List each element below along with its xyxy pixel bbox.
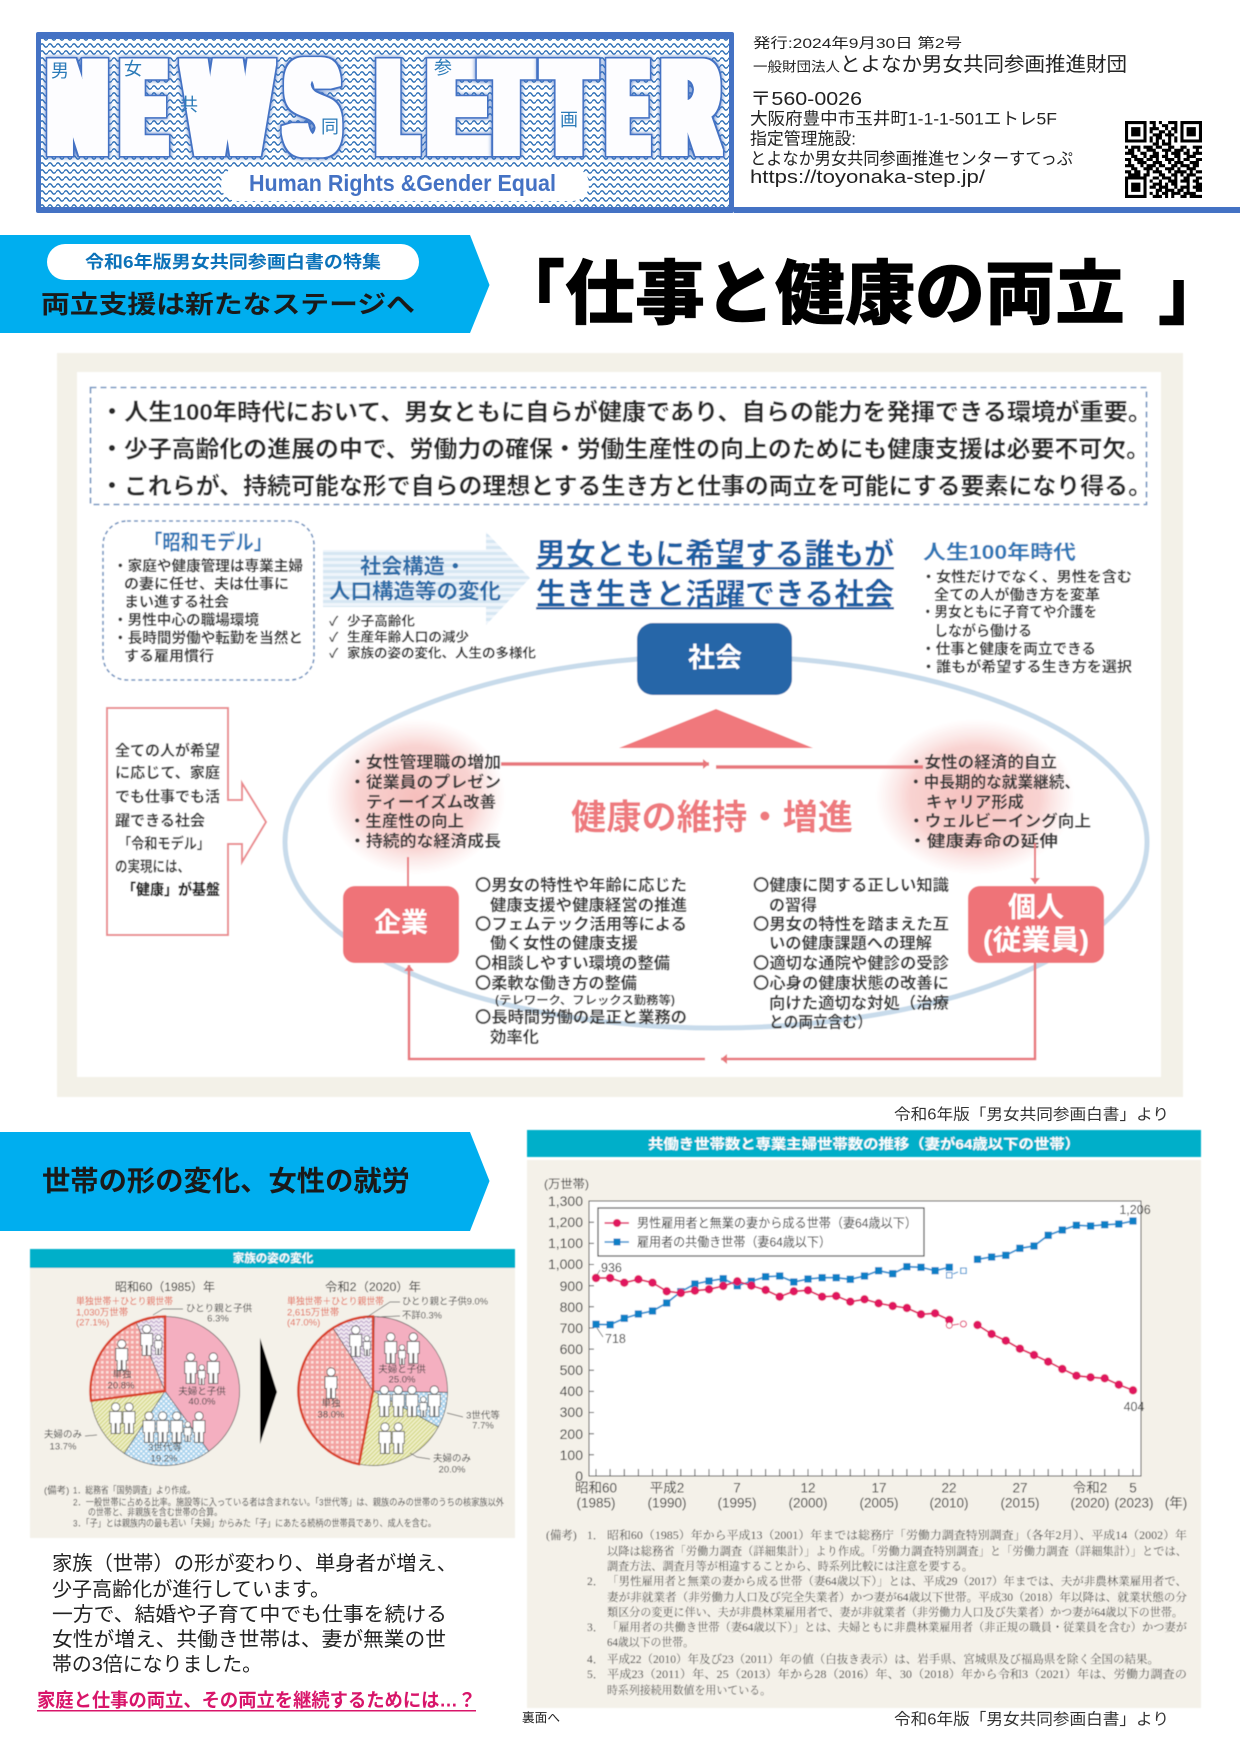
notes: line chart: 妻が非就業者（非労働力人口及び完全失業者）かつ妻が64歳以下世帯。平成30（2018）年以降は、就業状態の分 <box>607 1590 1187 1604</box>
pie chart: 1985: (27.1%) <box>76 1318 109 1328</box>
pie chart: 2020: 3世代等 <box>466 1410 500 1422</box>
text block: household summary <box>52 1552 457 1676</box>
label: health maintenance: 健康の維持・増進 <box>571 798 853 838</box>
text block: individual outcomes <box>908 752 1091 850</box>
notes: line chart: 昭和60（1985）年から平成13（2001）年までは総務庁「労働力調査特別調査」（各年2月）、平成14（2002）年 <box>607 1528 1188 1542</box>
x axis labels: 22 <box>941 1480 957 1496</box>
text block: individual actions: いの健康課題への理解 <box>769 934 932 952</box>
pie chart: 2020: 2,615万世帯 <box>287 1306 340 1318</box>
box: company: 企業 <box>374 908 428 938</box>
text block: company outcomes: ・従業員のプレゼン <box>349 772 501 792</box>
text block: company actions: (テレワーク、フレックス勤務等) <box>495 993 675 1007</box>
text block: company actions: 〇長時間労働の是正と業務の <box>475 1008 687 1026</box>
y axis labels: 900 <box>560 1278 583 1294</box>
text block: company outcomes: ・女性管理職の増加 <box>349 752 501 772</box>
logo kanji: 男女共同参画: 同 <box>321 117 339 137</box>
logo text: NEWS LETTER: E <box>430 34 487 182</box>
line chart <box>544 1177 1187 1510</box>
legend <box>598 1208 924 1256</box>
callout: Reiwa model: でも仕事でも活 <box>115 788 220 806</box>
y axis labels: 200 <box>560 1426 583 1442</box>
heading: target society: 生き生きと活躍できる社会 <box>536 578 894 612</box>
text block: household summary: 少子高齢化が進行しています。 <box>52 1578 330 1601</box>
icon: QR code <box>1125 121 1202 198</box>
legend: 雇用者の共働き世帯（妻64歳以下） <box>637 1234 831 1250</box>
highlight: company benefits <box>326 719 506 875</box>
publisher info: 大阪府豊中市玉井町1-1-1-501エトレ5F <box>750 110 1057 128</box>
logo text: NEWS LETTER <box>50 34 716 182</box>
title: 「仕事と健康の両立 <box>495 255 1125 333</box>
publisher info: 〒560-0026 <box>750 89 862 109</box>
text block: company actions: 効率化 <box>490 1028 539 1046</box>
header rule <box>734 207 1240 213</box>
data labels: 404 <box>1124 1400 1144 1414</box>
x axis labels: 5 <box>1129 1480 1137 1496</box>
y axis labels: 800 <box>560 1299 583 1315</box>
y axis labels: 1,200 <box>548 1214 583 1230</box>
callout: Reiwa model: の実現には、 <box>115 858 190 876</box>
text block: individual actions <box>753 876 949 1032</box>
pie chart: 2020: 単独 <box>321 1398 341 1410</box>
x axis labels: (2020) <box>1070 1496 1110 1510</box>
text block: individual actions: との両立含む） <box>769 1012 872 1032</box>
section banner: household change <box>0 1132 490 1231</box>
logo text: NEWS LETTER: T <box>484 34 529 182</box>
arrow: social structure change: ✓ <box>329 614 339 628</box>
publisher info: 一般財団法人 <box>753 60 841 74</box>
text block: company actions: 働く女性の健康支援 <box>490 934 638 952</box>
text block: household summary: 帯の3倍になりました。 <box>52 1653 262 1676</box>
arrows: cycle flow <box>408 764 1035 1059</box>
pie chart: 1985: 夫婦のみ <box>44 1428 82 1440</box>
text block: individual actions: 〇健康に関する正しい知識 <box>753 876 949 894</box>
pie chart: 2020: ひとり親と子供9.0% <box>402 1296 489 1308</box>
section banner: household change: 世帯の形の変化、女性の就労 <box>42 1166 410 1196</box>
data labels: 718 <box>605 1332 626 1346</box>
arrow: social structure change: ✓ <box>329 646 339 660</box>
pie chart: 1985: 40.0% <box>189 1396 216 1408</box>
logo text: NEWS LETTER: E <box>611 34 645 182</box>
logo kanji: 男女共同参画: 画 <box>560 110 578 130</box>
text block: 100-year life era: しながら働ける <box>934 622 1032 640</box>
page turn note: 裏面へ <box>522 1711 560 1725</box>
y axis labels: 1,000 <box>548 1256 583 1272</box>
panel heading <box>527 1130 1201 1157</box>
pie chart: 1985: 19.2% <box>151 1454 178 1464</box>
x axis labels: 平成2 <box>650 1480 684 1496</box>
notes: line chart <box>546 1528 1188 1697</box>
text block: individual actions: 〇男女の特性を踏まえた互 <box>753 914 949 934</box>
notes: line chart: 4． <box>587 1654 604 1666</box>
pie chart: 2020: 夫婦のみ <box>433 1452 471 1464</box>
pie chart: 1985 <box>44 1280 253 1466</box>
pie chart: 2020: 不詳0.3% <box>402 1310 443 1322</box>
x axis labels: (2000) <box>788 1496 828 1510</box>
panel: dual income chart <box>527 1130 1201 1708</box>
series: single earner households <box>596 1278 1133 1390</box>
notes: line chart: 平成22（2010）年及び23（2011）年の値（白抜き表示）は、岩手県、宮城県及び福島県を除く全国の結果。 <box>607 1652 1159 1666</box>
y axis labels: 100 <box>560 1447 583 1463</box>
arrow: social structure change: 社会構造・ <box>360 556 466 578</box>
source note: chart: 令和6年版「男女共同参画白書」より <box>894 1710 1169 1728</box>
logo kanji: 男女共同参画 <box>51 58 578 137</box>
arrow: social structure change <box>323 532 536 660</box>
text block: company actions: 〇柔軟な働き方の整備 <box>475 974 637 992</box>
pie chart: 2020: 20.0% <box>439 1464 466 1476</box>
text block: individual actions: 〇心身の健康状態の改善に <box>753 974 949 992</box>
box: society <box>637 623 792 695</box>
text block: company actions: 〇フェムテック活用等による <box>475 914 687 934</box>
x axis labels: (2010) <box>929 1496 969 1510</box>
callout: Reiwa model: 「健康」が基盤 <box>122 880 220 898</box>
x axis labels: (1985) <box>576 1496 616 1510</box>
x axis labels: (2005) <box>859 1496 899 1510</box>
pie chart: 1985: ひとり親と子供 <box>186 1302 253 1314</box>
logo text: NEWS LETTER: W <box>187 34 268 182</box>
text block: individual outcomes: ・中長期的な就業継続、 <box>908 774 1080 792</box>
text block: individual outcomes: ・健康寿命の延伸 <box>908 832 1058 850</box>
panel heading: 共働き世帯数と専業主婦世帯数の推移（妻が64歳以下の世帯） <box>648 1136 1080 1152</box>
text block: 100-year life era: ・仕事と健康を両立できる <box>921 640 1096 658</box>
pie chart: 2020: 7.7% <box>472 1420 494 1432</box>
heading: target society <box>536 538 894 612</box>
publisher info: https://toyonaka-step.jp/ <box>750 167 985 187</box>
notes: pie charts: 3．「子」とは親族内の最も若い「夫婦」からみた「子」にあたる続柄の世帯員であり、成人を含む。 <box>73 1518 436 1530</box>
subtitle pill: Human Rights & Gender Equal: Human Rights &Gender Equal <box>249 170 556 196</box>
text block: household summary: 女性が増え、共働き世帯は、妻が無業の世 <box>52 1628 446 1651</box>
text block: 100-year life era: ・女性だけでなく、男性を含む <box>921 568 1132 586</box>
text block: company actions: 〇男女の特性や年齢に応じた <box>475 876 687 894</box>
panel: Showa model: 「昭和モデル」 <box>144 530 272 554</box>
callout: three key points: ・これらが、持続可能な形で自らの理想とする生き方と仕事の両立を可能にする要素になり得る。 <box>100 472 1152 499</box>
pie chart: 1985: 単独世帯＋ひとり親世帯 <box>76 1296 173 1308</box>
logo text: NEWS LETTER: L <box>381 34 414 182</box>
series: dual income households <box>596 1221 1133 1325</box>
y axis labels: 300 <box>560 1404 583 1420</box>
text block: company actions <box>475 876 687 1046</box>
notes: pie charts: 1．総務省「国勢調査」より作成。 <box>73 1484 195 1496</box>
notes: line chart: 時系列接続用数値を用いている。 <box>607 1683 771 1697</box>
panel: Showa model <box>103 521 314 680</box>
text block: company outcomes: ・持続的な経済成長 <box>349 832 501 850</box>
text block: individual actions: の習得 <box>769 896 817 914</box>
x axis labels: (1990) <box>647 1496 687 1510</box>
arrow: social structure change: 家族の姿の変化、人生の多様化 <box>347 646 536 660</box>
pie chart: 2020: 38.0% <box>318 1410 345 1420</box>
callout: Reiwa model: に応じて、家庭 <box>115 764 220 782</box>
callout: Reiwa model: 「令和モデル」 <box>118 834 210 852</box>
logo kanji: 男女共同参画: 女 <box>124 59 142 79</box>
x axis labels: 令和2 <box>1073 1480 1107 1496</box>
notes: line chart: (備考) <box>546 1528 577 1542</box>
pie chart: 1985: 単独 <box>112 1368 132 1380</box>
logo kanji: 男女共同参画: 参 <box>434 58 452 78</box>
legend: 男性雇用者と無業の妻から成る世帯（妻64歳以下） <box>637 1216 917 1230</box>
text block: individual outcomes: ・女性の経済的自立 <box>908 752 1057 772</box>
notes: line chart: 64歳以下の世帯。 <box>607 1635 694 1649</box>
data labels: 1,206 <box>1119 1203 1151 1217</box>
y axis labels: 0 <box>575 1468 583 1484</box>
x axis labels: (2015) <box>1000 1496 1040 1510</box>
logo text: NEWS LETTER: R <box>664 34 716 182</box>
panel: family composition pies <box>30 1249 515 1538</box>
pie chart: 1985: 昭和60（1985）年 <box>115 1280 215 1294</box>
notes: line chart: 1． <box>587 1530 604 1542</box>
text block: household summary: 一方で、結婚や子育て中でも仕事を続ける <box>52 1603 447 1626</box>
data labels: 936 <box>601 1261 622 1275</box>
text block: company outcomes: ・生産性の向上 <box>349 812 464 830</box>
text block: company outcomes <box>349 752 501 850</box>
panel: Showa model: ・家庭や健康管理は専業主婦 <box>113 557 303 575</box>
panel: Showa model: する雇用慣行 <box>124 647 214 665</box>
x axis labels: (2023) <box>1114 1496 1154 1510</box>
diagram: ellipse cycle <box>285 656 1147 1028</box>
notes: line chart: 以降は総務省「労働力調査（詳細集計）」より作成。「労働力調査特別調査」と「労働力調査（詳細集計）」とでは、 <box>607 1544 1187 1558</box>
text block: individual actions: 〇適切な通院や健診の受診 <box>753 954 949 972</box>
logo text: NEWS LETTER: T <box>546 34 592 182</box>
logo text: NEWS LETTER: N <box>50 34 105 182</box>
y axis labels: 500 <box>560 1362 583 1378</box>
text block: individual outcomes: キャリア形成 <box>926 792 1024 812</box>
pie chart: 2020: 夫婦と子供 <box>378 1364 426 1376</box>
callout: three key points: ・少子高齢化の進展の中で、労働力の確保・労働生産性の向上のためにも健康支援は必要不可欠。 <box>100 435 1150 462</box>
x axis labels: 17 <box>871 1480 887 1496</box>
text block: household summary: 家族（世帯）の形が変わり、単身者が増え、 <box>52 1552 457 1575</box>
box: individual: 個人 <box>1008 892 1064 922</box>
publisher info: 発行:2024年9月30日 第2号 <box>753 35 962 51</box>
pill: white paper feature: 令和6年版男女共同参画白書の特集 <box>85 252 382 272</box>
y axis labels: 700 <box>560 1320 583 1336</box>
data labels <box>597 1203 1151 1414</box>
notes: line chart: 2． <box>587 1576 604 1588</box>
text block: individual actions: 向けた適切な対処（治療 <box>769 994 949 1012</box>
arrow: social structure change: 生産年齢人口の減少 <box>347 630 469 644</box>
pie chart: 2020: 25.0% <box>389 1374 416 1386</box>
source note: diagram: 令和6年版「男女共同参画白書」より <box>894 1106 1169 1124</box>
y axis labels: 1,100 <box>548 1235 583 1251</box>
box: individual <box>968 886 1104 963</box>
text block: individual outcomes: ・ウェルビーイング向上 <box>908 812 1091 830</box>
heading: target society: 男女ともに希望する誰もが <box>536 538 894 572</box>
y axis labels <box>548 1193 583 1484</box>
text block: company outcomes: ティーイズム改善 <box>366 792 496 812</box>
panel: Showa model: ・長時間労働や転勤を当然と <box>113 629 303 647</box>
panel: Showa model: の妻に任せ、夫は仕事に <box>124 575 289 593</box>
logo text: NEWS LETTER: E <box>124 34 163 182</box>
pie chart: 2020: 単独世帯＋ひとり親世帯 <box>287 1296 384 1308</box>
logo text: NEWS LETTER: S <box>288 34 337 182</box>
x axis labels <box>575 1480 1187 1510</box>
pie chart: 1985: 6.3% <box>207 1314 229 1324</box>
panel heading <box>30 1249 515 1268</box>
y axis labels: 1,300 <box>548 1193 583 1209</box>
text block: company actions: 〇相談しやすい環境の整備 <box>475 954 670 972</box>
pie chart: 1985: 1,030万世帯 <box>76 1306 129 1318</box>
x axis labels: 27 <box>1012 1480 1028 1496</box>
arrow: social structure change: 人口構造等の変化 <box>329 580 501 604</box>
x axis labels: 昭和60 <box>575 1480 617 1496</box>
publisher info <box>750 35 1127 187</box>
notes: pie charts: 2．一般世帯に占める比率。施設等に入っている者は含まれない。「3世代等」は、親族のみの世帯のうちの核家族以外 <box>73 1496 504 1508</box>
callout: three key points: ・人生100年時代において、男女ともに自らが健康であり、自らの能力を発揮できる環境が重要。 <box>100 398 1152 425</box>
text block: 100-year life era <box>921 541 1133 676</box>
box: society: 社会 <box>688 643 742 673</box>
pie chart: 1985: 20.8% <box>108 1380 135 1392</box>
masthead: news letter logo <box>36 32 734 213</box>
title: 」 <box>1158 255 1228 333</box>
publisher info: とよなか男女共同参画推進センターすてっぷ <box>750 150 1073 168</box>
notes: pie charts: (備考) <box>44 1484 69 1496</box>
arrow: social structure change: 少子高齢化 <box>347 614 415 628</box>
panel: Showa model: まい進する社会 <box>124 594 230 611</box>
callout: Reiwa model: 全ての人が希望 <box>115 742 220 760</box>
open markers: 2010 and 2011 <box>946 1268 966 1328</box>
text block: 100-year life era: 人生100年時代 <box>923 541 1076 564</box>
pie chart: 2020: (47.0%) <box>287 1318 320 1328</box>
x axis labels: 12 <box>800 1480 816 1496</box>
publisher info: 指定管理施設: <box>750 130 856 148</box>
notes: line chart: 5． <box>587 1669 604 1681</box>
pie chart: 1985: 13.7% <box>50 1442 77 1452</box>
notes: line chart: 平成23（2011）年、25（2013）年から28（2016）年、30（2018）年から令和3（2021）年は、労働力調査の <box>607 1667 1187 1681</box>
panel: Showa model: ・男性中心の職場環境 <box>113 612 260 629</box>
pie chart: 2020: 令和2（2020）年 <box>325 1280 421 1294</box>
x axis labels: (1995) <box>717 1496 757 1510</box>
line chart: (万世帯) <box>544 1177 589 1191</box>
pie chart: 1985: 3世代等 <box>148 1442 182 1454</box>
section banner: feature heading <box>0 235 490 333</box>
notes: line chart: 調査方法、調査月等が相違することから、時系列比較には注意を要する。 <box>607 1559 973 1573</box>
box: company <box>343 886 459 963</box>
x axis labels: (年) <box>1165 1496 1187 1510</box>
box: individual: (従業員) <box>983 924 1089 956</box>
panel heading: 家族の姿の変化 <box>233 1251 314 1265</box>
icon: triangle <box>619 709 813 748</box>
y axis labels: 600 <box>560 1341 583 1357</box>
publisher info: とよなか男女共同参画推進財団 <box>840 53 1127 76</box>
notes: line chart: 「男性雇用者と無業の妻から成る世帯（妻64歳以下）」とは、平成29（2017）年までは、夫が非農林業雇用者で、 <box>607 1574 1187 1588</box>
arrow: social structure change: ✓ <box>329 630 339 644</box>
pie chart: 1985: 夫婦と子供 <box>178 1386 226 1398</box>
callout: pink question: 家庭と仕事の両立、その両立を継続するためには…？ <box>37 1690 476 1712</box>
x axis labels: 7 <box>733 1480 741 1496</box>
notes: pie charts <box>44 1484 504 1530</box>
notes: line chart: 類区分の変更に伴い、夫が非農林業雇用者で、妻が非就業者（非労働力人口及び失業者）かつ妻が64歳以下の世帯。 <box>607 1605 1183 1619</box>
text block: 100-year life era: 全ての人が働き方を変革 <box>934 586 1100 604</box>
highlight: individual benefits <box>875 719 1075 875</box>
text block: 100-year life era: ・男女ともに子育てや介護を <box>921 603 1097 621</box>
arrow: 1985 to 2020 <box>260 1338 277 1444</box>
callout: three key points <box>90 388 1152 504</box>
notes: line chart: 3． <box>587 1622 604 1634</box>
text block: company actions: 健康支援や健康経営の推進 <box>490 896 687 914</box>
section banner: feature heading: 両立支援は新たなステージへ <box>41 291 415 319</box>
logo kanji: 男女共同参画: 共 <box>180 95 198 115</box>
callout: Reiwa model: 躍できる社会 <box>115 812 205 830</box>
notes: line chart: 「雇用者の共働き世帯（妻64歳以下）」とは、夫婦ともに非農林業雇用者（非正規の職員・従業員を含む）かつ妻が <box>607 1620 1187 1634</box>
callout: Reiwa model <box>107 708 266 935</box>
y axis labels: 400 <box>560 1383 583 1399</box>
notes: pie charts: の世帯と、非親族を含む世帯の合算。 <box>88 1506 222 1518</box>
pill: white paper feature <box>47 244 419 280</box>
pie chart: 2020 <box>287 1280 500 1476</box>
logo kanji: 男女共同参画: 男 <box>51 61 69 81</box>
text block: 100-year life era: ・誰もが希望する生き方を選択 <box>921 658 1133 676</box>
panel: work and health diagram <box>57 353 1183 1097</box>
